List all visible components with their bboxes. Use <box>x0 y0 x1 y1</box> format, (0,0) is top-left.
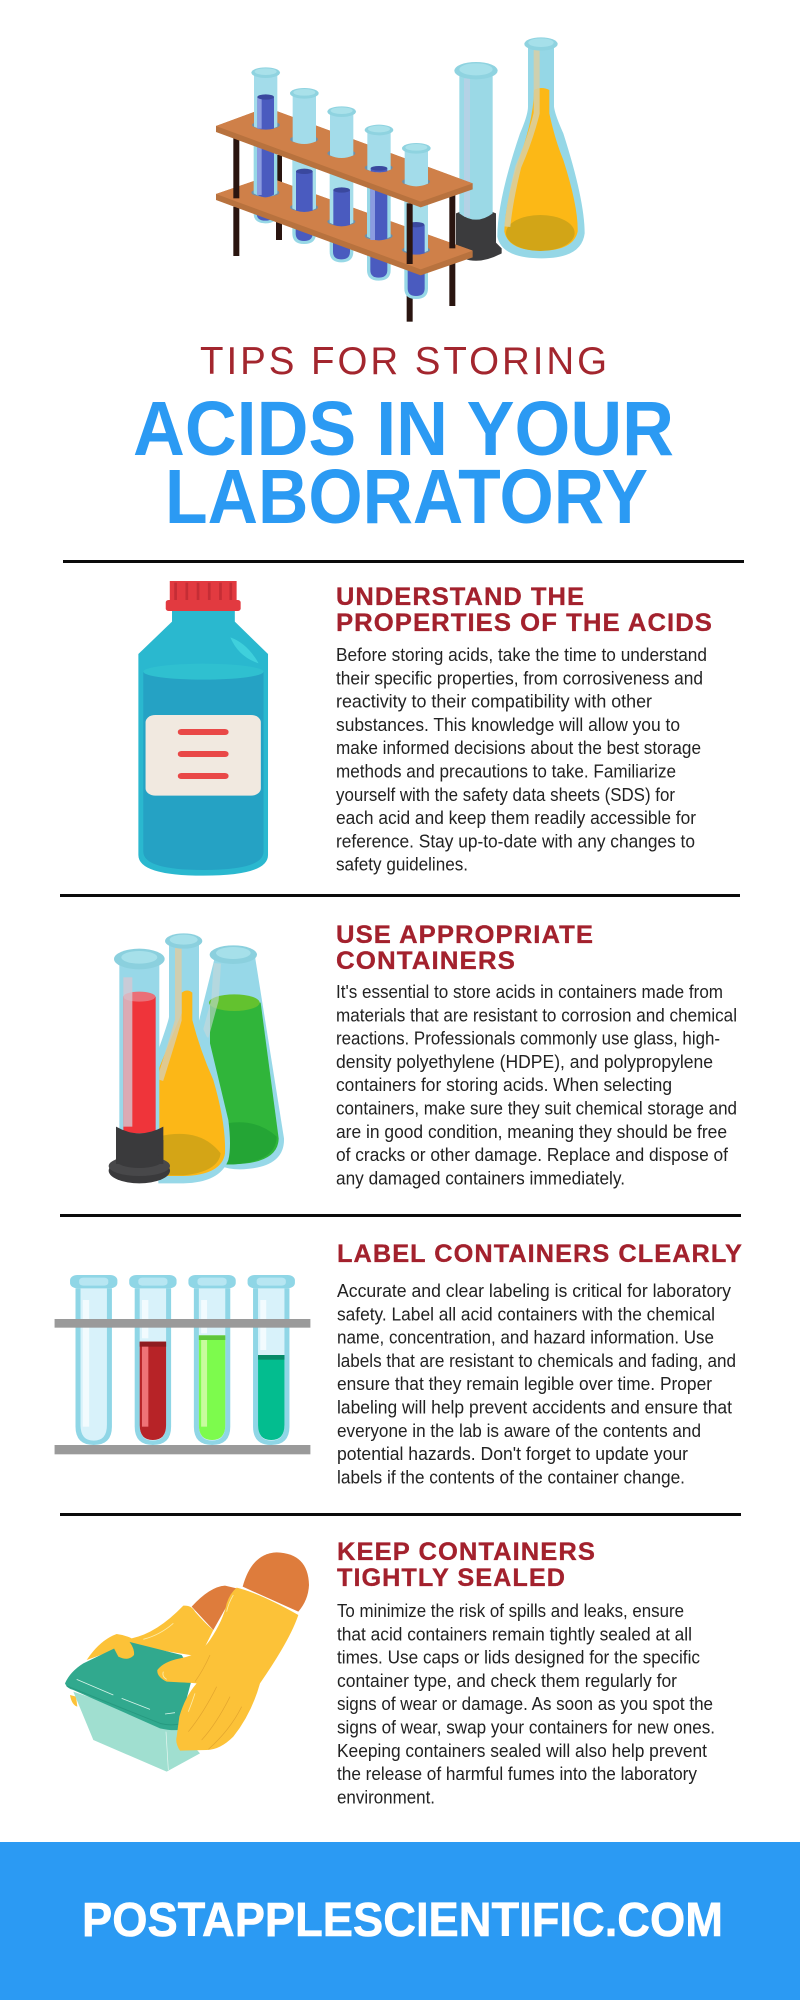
text block: containers body: any damaged containers immediately. <box>336 1168 625 1188</box>
icon: lower rack shelf <box>216 177 473 275</box>
text block: properties body: yourself with the safety data sheets (SDS) for <box>336 785 675 805</box>
text block: labelling body: Accurate and clear labeling is critical for laboratory <box>337 1281 731 1301</box>
footer url: POSTAPPLESCIENTIFIC.COM <box>82 1894 723 1947</box>
text block: sealing body: signs of wear or damage. As soon as you spot the <box>337 1694 713 1714</box>
text block: containers body: reactions. Professionals commonly use glass, high- <box>336 1029 720 1049</box>
text block: containers body: density polyethylene (HDPE), and polypropylene <box>336 1052 713 1072</box>
text block: containers body: containers for storing acids. When selecting <box>336 1075 672 1095</box>
icon: three coloured flasks <box>109 933 284 1183</box>
icon: red cylinder <box>109 949 170 1183</box>
heading: keep containers tightly sealed: TIGHTLY SEALED <box>337 1565 566 1592</box>
text block: properties body: Before storing acids, take the time to understand <box>336 645 707 665</box>
footer banner <box>0 1842 800 2000</box>
icon: container <box>65 1642 200 1772</box>
heading: keep containers tightly sealed: KEEP CONTAINERS <box>337 1539 596 1566</box>
heading: use appropriate containers <box>336 922 594 975</box>
icon: graduated cylinder <box>454 62 502 261</box>
icon: conical flask with yellow liquid <box>497 37 585 258</box>
text block: sealing body: the release of harmful fumes into the laboratory <box>337 1764 697 1784</box>
text block: properties body <box>336 645 707 875</box>
text block: sealing body: Keeping containers sealed will also help prevent <box>337 1741 707 1761</box>
icon: left glove <box>70 1606 213 1707</box>
text block: properties body: their specific properties, from corrosiveness and <box>336 668 703 688</box>
icon: right glove <box>143 1588 298 1751</box>
text block: labelling body: ensure that they remain legible over time. Proper <box>337 1374 712 1394</box>
icon: upper tube sections <box>251 67 431 186</box>
text block: containers body: materials that are resistant to corrosion and chemical <box>336 1005 737 1025</box>
text block: properties body: substances. This knowledge will allow you to <box>336 715 680 735</box>
text block: sealing body: times. Use caps or lids designed for the specific <box>337 1648 700 1668</box>
text block: properties body: each acid and keep them readily accessible for <box>336 808 696 828</box>
icon: red tube <box>129 1275 177 1445</box>
text block: labelling body: labeling will help prevent accidents and ensure that <box>337 1398 732 1418</box>
text block: labelling body: safety. Label all acid containers with the chemical <box>337 1304 715 1324</box>
title: tips for storing: TIPS FOR STORING <box>200 340 610 383</box>
heading: use appropriate containers: CONTAINERS <box>336 948 516 975</box>
text block: labelling body: everyone in the lab is aware of the contents and <box>337 1421 701 1441</box>
text block: sealing body: environment. <box>337 1787 435 1807</box>
text block: sealing body <box>337 1601 715 1807</box>
heading: keep containers tightly sealed <box>337 1539 596 1592</box>
panel: keep containers tightly sealed <box>65 1539 715 1807</box>
heading: understand the properties <box>336 584 713 637</box>
icon: yellow flask <box>158 933 230 1183</box>
text block: containers body: of cracks or other damage. Replace and dispose of <box>336 1145 729 1165</box>
text block: sealing body: signs of wear, swap your containers for new ones. <box>337 1718 715 1738</box>
panel: use appropriate containers <box>109 922 737 1188</box>
icon: gloved hands sealing a container <box>65 1552 309 1772</box>
icon: front posts <box>233 135 413 264</box>
title: acids in your laboratory <box>133 386 674 540</box>
text block: properties body: methods and precautions to take. Familiarize <box>336 762 676 782</box>
icon: green tube <box>188 1275 236 1445</box>
text block: labelling body: potential hazards. Don't forget to update your <box>337 1444 688 1464</box>
panel: label containers clearly <box>55 1241 743 1487</box>
icon: forearms <box>192 1552 309 1630</box>
icon: bottle label <box>146 715 261 796</box>
icon: green flask <box>200 945 284 1169</box>
heading: understand the properties: PROPERTIES OF THE ACIDS <box>336 610 713 637</box>
text block: containers body <box>336 982 737 1188</box>
icon: empty tube <box>70 1275 117 1445</box>
text block: labelling body: labels that are resistant to chemicals and fading, and <box>337 1351 736 1371</box>
title: acids in your laboratory: LABORATORY <box>165 454 648 540</box>
icon: right rear post front of shelf <box>449 195 455 248</box>
icon: four test tubes in rack <box>55 1275 310 1454</box>
text block: sealing body: To minimize the risk of spills and leaks, ensure <box>337 1601 684 1621</box>
panel: understand the properties of the acids <box>138 581 713 876</box>
text block: properties body: reactivity to their compatibility with other <box>336 692 652 712</box>
text block: labelling body: labels if the contents of the container change. <box>337 1467 685 1487</box>
text block: properties body: reference. Stay up-to-date with any changes to <box>336 831 695 851</box>
icon: back posts <box>233 155 455 322</box>
icon: lower tube ends <box>254 197 428 299</box>
icon: test tube rack with cylinder and flask <box>216 37 585 322</box>
icon: rack bars <box>55 1319 310 1454</box>
icon: upper rack shelf <box>216 107 473 207</box>
icon: middle tube sections <box>251 133 430 255</box>
text block: containers body: It's essential to store acids in containers made from <box>336 982 723 1002</box>
text block: containers body: are in good condition, meaning they should be free <box>336 1122 727 1142</box>
icon: teal tube <box>248 1275 295 1445</box>
text block: labelling body: name, concentration, and hazard information. Use <box>337 1328 714 1348</box>
text block: properties body: make informed decisions about the best storage <box>336 738 701 758</box>
title: acids in your laboratory: ACIDS IN YOUR <box>133 386 674 472</box>
heading: use appropriate containers: USE APPROPRIATE <box>336 922 594 949</box>
icon: blue bottle with red cap <box>138 581 268 876</box>
text block: labelling body <box>337 1281 736 1487</box>
text block: properties body: safety guidelines. <box>336 855 468 875</box>
heading: understand the properties: UNDERSTAND THE <box>336 584 585 611</box>
text block: sealing body: container type, and check them regularly for <box>337 1671 677 1691</box>
icon: left fingers <box>110 1636 134 1659</box>
text block: containers body: containers, make sure they suit chemical storage and <box>336 1098 737 1118</box>
text block: sealing body: that acid containers remain tightly sealed at all <box>337 1624 692 1644</box>
heading: label containers clearly: LABEL CONTAINERS CLEARLY <box>337 1241 743 1268</box>
